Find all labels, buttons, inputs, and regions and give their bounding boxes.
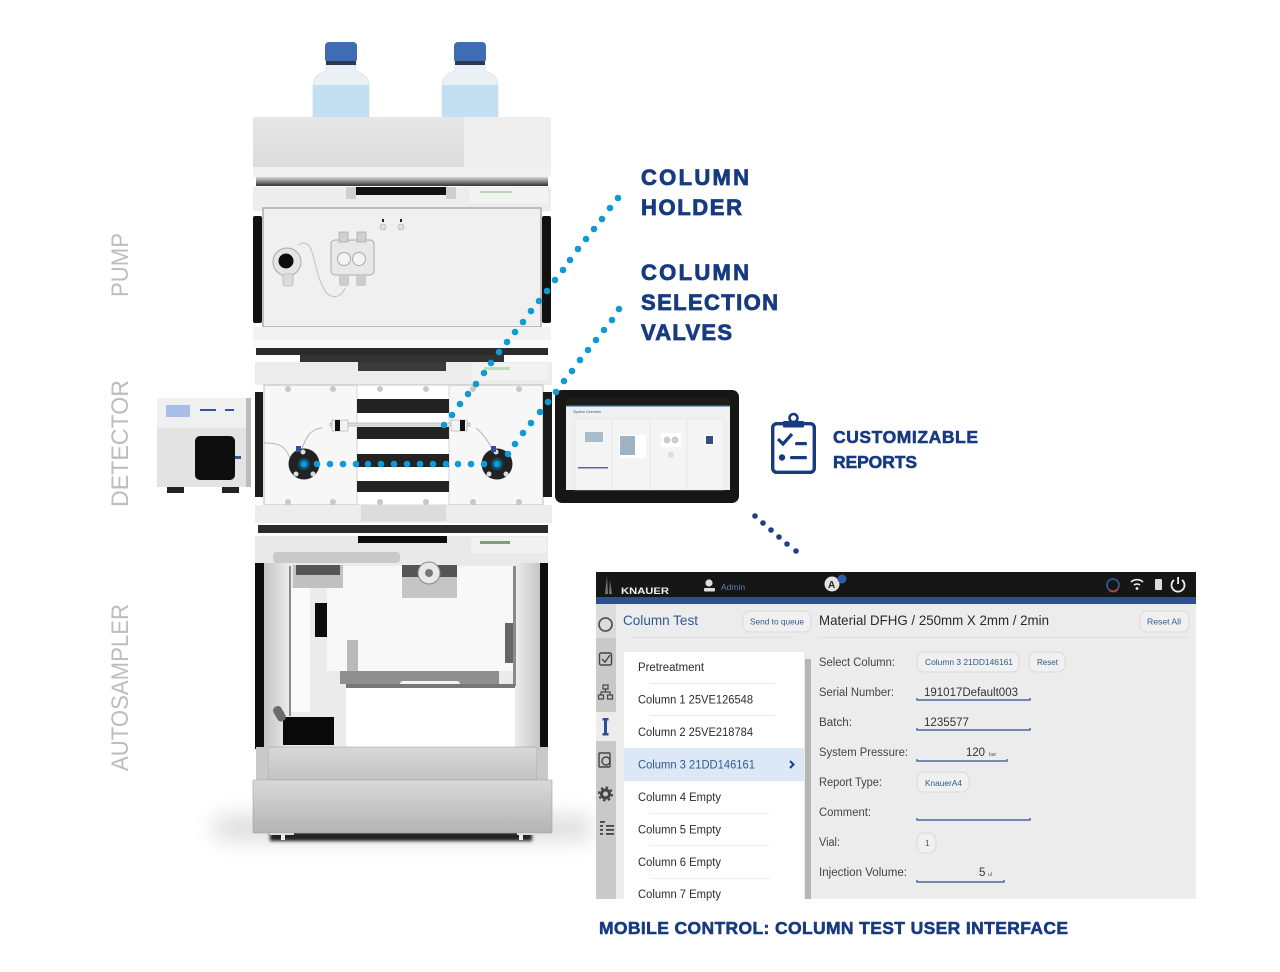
column module [255, 362, 552, 533]
panel: column test user interface [596, 572, 1196, 901]
heading: column holder [641, 165, 749, 220]
icon: gear [599, 788, 612, 800]
detector box [157, 398, 251, 493]
form fields: Vial: [819, 837, 840, 849]
logo: KNAUER [621, 586, 670, 596]
user icon [704, 579, 715, 592]
form fields: 1 [925, 838, 930, 848]
sidebar [596, 604, 616, 899]
left valve [288, 446, 320, 480]
solvent bottle right [442, 42, 498, 117]
form fields: Reset [1037, 657, 1059, 667]
column list: Column 6 Empty [638, 857, 721, 869]
form fields: Column 3 21DD146161 [925, 657, 1013, 667]
tablet screen title: System Overview [573, 410, 601, 414]
dotted line: tablet to interface [752, 513, 799, 554]
injector cutouts [293, 562, 457, 598]
icon: clipboard checklist [773, 414, 814, 472]
icon: list [600, 821, 614, 835]
icon: column [602, 718, 608, 736]
send to queue button [743, 611, 811, 632]
floor shadow [215, 816, 590, 840]
form fields: 120 [966, 747, 985, 759]
automation icon: A [828, 580, 835, 591]
form fields [819, 652, 1065, 882]
form fields: 1235577 [924, 717, 969, 729]
form fields: System Pressure: [819, 747, 908, 759]
heading: column selection valves: COLUMN [641, 260, 749, 285]
heading: column holder: COLUMN [641, 165, 749, 190]
dotted line: column holder [441, 195, 621, 428]
base [253, 780, 552, 841]
right valve [482, 446, 512, 480]
form fields: Select Column: [819, 657, 895, 669]
icon: report [599, 753, 610, 767]
column list [624, 652, 811, 901]
status icons [1107, 577, 1184, 592]
heading: column selection valves: SELECTION [641, 290, 778, 315]
column list: Column 7 Empty [638, 889, 721, 901]
form fields: 5 [979, 867, 985, 879]
column list: Column 5 Empty [638, 824, 721, 836]
header bar [596, 572, 1196, 604]
form fields: Report Type: [819, 777, 882, 789]
solvent tray [253, 117, 551, 186]
column bays [357, 399, 449, 492]
admin name: Admin [721, 582, 745, 592]
form fields: ul [988, 872, 992, 878]
icon: checkbox [600, 653, 612, 665]
heading: customizable reports: REPORTS [833, 452, 917, 472]
pump head [331, 232, 374, 286]
interface title: Column Test [623, 612, 698, 628]
form fields: Comment: [819, 807, 871, 819]
column list: Column 1 25VE126548 [638, 694, 753, 706]
icon: circle [599, 618, 612, 631]
heading: customizable reports: CUSTOMIZABLE [833, 427, 978, 447]
heading: column holder: HOLDER [641, 195, 742, 220]
caption: MOBILE CONTROL: COLUMN TEST USER INTERFACE [599, 918, 1068, 938]
form fields: Batch: [819, 717, 852, 729]
dotted line: selection valves [505, 306, 622, 457]
label: pump: PUMP [107, 233, 134, 297]
drawer [268, 747, 537, 780]
form fields: Serial Number: [819, 687, 894, 699]
column list: Column 4 Empty [638, 792, 721, 804]
column [264, 420, 494, 458]
heading: column selection valves: VALVES [641, 320, 732, 345]
automation icon [824, 574, 846, 592]
heading: customizable reports [833, 427, 978, 472]
column list: Column 2 25VE218784 [638, 727, 754, 739]
sample tray arm [340, 671, 499, 684]
solvent bottle left [313, 42, 369, 117]
label: autosampler: AUTOSAMPLER [107, 604, 134, 771]
form fields: KnauerA4 [925, 778, 962, 788]
waste box [272, 705, 334, 745]
dotted line: valve to valve [301, 461, 500, 467]
reset all button [1140, 611, 1189, 632]
selected row [624, 748, 804, 781]
send to queue button: Send to queue [750, 616, 804, 626]
pump module [253, 187, 551, 362]
tablet [555, 390, 739, 503]
form fields: 191017Default003 [924, 687, 1018, 699]
method title: Material DFHG / 250mm X 2mm / 2min [819, 612, 1049, 628]
form fields: bar [989, 752, 997, 758]
autosampler module [255, 536, 548, 780]
sample tray [346, 688, 515, 747]
column list: Column 3 21DD146161 [638, 760, 755, 772]
column list: Pretreatment [638, 662, 705, 674]
heading: column selection valves [641, 260, 778, 345]
icon: network [598, 685, 612, 699]
tablet screen cards [575, 419, 724, 490]
label: detector: DETECTOR [107, 380, 134, 507]
pump inlet fitting [273, 243, 345, 297]
reset all button: Reset All [1147, 616, 1181, 626]
form fields: Injection Volume: [819, 867, 907, 879]
